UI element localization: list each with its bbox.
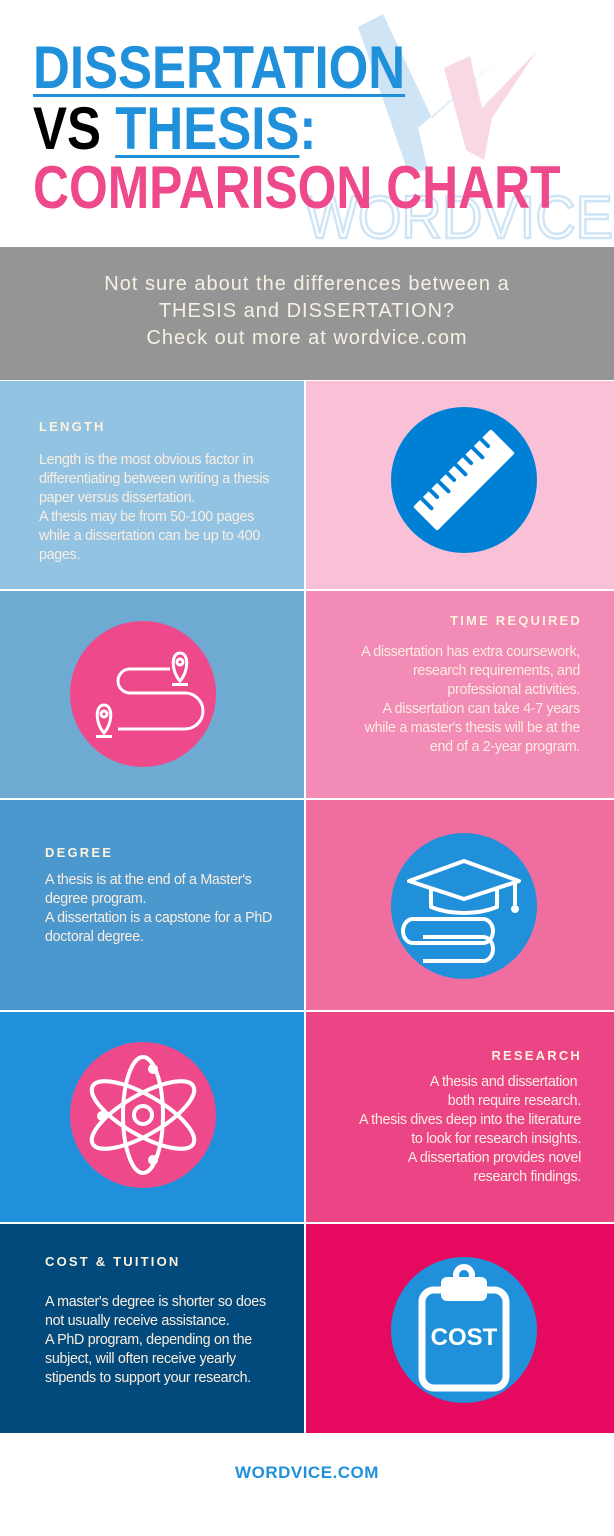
icon: atom — [0, 1012, 304, 1222]
panel: length — [0, 381, 304, 589]
panel: research: to look for research insights. — [411, 1131, 581, 1147]
panel: research — [306, 1012, 614, 1222]
panel: time required: TIME REQUIRED — [450, 613, 582, 628]
panel: length: Length is the most obvious factor in — [39, 452, 253, 468]
panel: time required: A dissertation can take 4-7 years — [382, 701, 580, 717]
panel: cost & tuition: A master's degree is shorter so does — [45, 1294, 266, 1310]
panel: time required — [306, 591, 614, 798]
panel: research: A dissertation provides novel — [408, 1150, 581, 1166]
panel: time required: research requirements, and — [413, 663, 580, 679]
panel: degree: doctoral degree. — [45, 929, 144, 945]
panel: length: A thesis may be from 50-100 pages — [39, 509, 254, 525]
panel: time required: A dissertation has extra coursework, — [361, 644, 580, 660]
panel: degree: A dissertation is a capstone for a PhD — [45, 910, 272, 926]
panel: length: differentiating between writing a thesis — [39, 471, 269, 487]
panel: length: while a dissertation can be up to 400 — [39, 528, 260, 544]
icon: ruler — [306, 381, 614, 589]
panel: research: both require research. — [448, 1093, 581, 1109]
banner: THESIS and DISSERTATION? — [159, 300, 455, 322]
panel: degree: degree program. — [45, 891, 146, 907]
icon: cost clipboard — [306, 1224, 614, 1433]
panel: research: A thesis dives deep into the literature — [359, 1112, 581, 1128]
icon: graduation cap — [306, 800, 614, 1010]
panel: cost & tuition: not usually receive assistance. — [45, 1313, 230, 1329]
icon: route — [0, 591, 304, 798]
icon: cost clipboard: COST — [431, 1324, 498, 1351]
panel: degree — [0, 800, 304, 1010]
title: COMPARISON CHART — [33, 154, 561, 221]
banner: Not sure about the differences between a — [104, 273, 510, 295]
title: DISSERTATION — [33, 34, 405, 101]
title: VS THESIS: — [33, 95, 316, 162]
footer: WORDVICE.COM — [235, 1463, 379, 1482]
panel: cost & tuition: subject, will often receive yearly — [45, 1351, 236, 1367]
panel: research: A thesis and dissertation — [430, 1074, 577, 1090]
panel: time required: end of a 2-year program. — [430, 739, 580, 755]
panel: cost & tuition: A PhD program, depending on the — [45, 1332, 252, 1348]
panel: length: pages. — [39, 547, 80, 563]
panel: cost & tuition: stipends to support your research. — [45, 1370, 251, 1386]
banner — [0, 247, 614, 380]
panel: time required: while a master's thesis will be at the — [365, 720, 580, 736]
panel: research: research findings. — [474, 1169, 581, 1185]
panel: cost & tuition: COST & TUITION — [45, 1254, 181, 1269]
panel: degree: A thesis is at the end of a Master's — [45, 872, 252, 888]
panel: length: LENGTH — [39, 419, 106, 434]
panel: degree: DEGREE — [45, 845, 113, 860]
title — [33, 34, 561, 221]
panel: length: paper versus dissertation. — [39, 490, 195, 506]
banner: Check out more at wordvice.com — [146, 327, 468, 349]
watermark logo — [305, 14, 613, 245]
panel: research: RESEARCH — [491, 1048, 582, 1063]
panel: cost & tuition — [0, 1224, 304, 1433]
panel: time required: professional activities. — [447, 682, 580, 698]
